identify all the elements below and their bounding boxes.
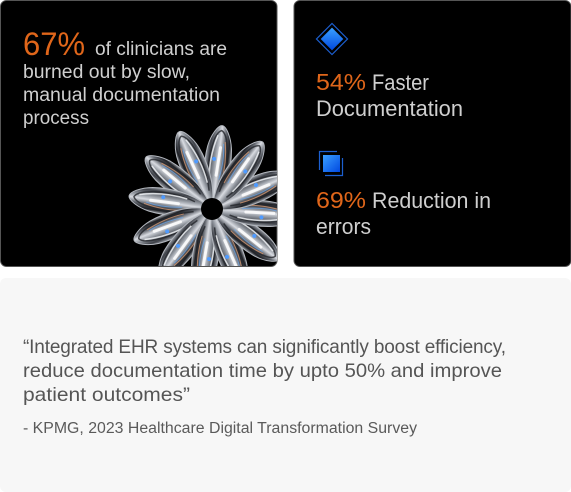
statistic: 69% reduction in errors xyxy=(316,187,491,239)
statistic text: 67% of clinicians: of clinicians are xyxy=(95,39,227,60)
quote text: “Integrated EHR systems can significantly boost efficiency, xyxy=(23,337,506,358)
statistic text: 67% of clinicians xyxy=(23,26,227,129)
statistic: 54% faster documentation: Faster xyxy=(372,70,429,95)
icon: blue diamond xyxy=(316,23,348,55)
statistic: 54% faster documentation: 54% xyxy=(316,69,366,95)
quote text: patient outcomes” xyxy=(23,384,190,406)
quote text xyxy=(23,337,506,406)
statistic: 69% reduction in errors: errors xyxy=(316,214,371,239)
panel: burnout statistic xyxy=(0,0,278,267)
statistic: 69% reduction in errors: 69% xyxy=(316,187,366,213)
quote source: - KPMG, 2023 Healthcare Digital Transformation Survey xyxy=(23,420,417,437)
panel: quote xyxy=(0,278,571,492)
image: glass flower xyxy=(128,125,277,266)
statistic text: 67% of clinicians: manual documentation xyxy=(23,85,220,106)
quote text: reduce documentation time by upto 50% and improve xyxy=(23,360,502,382)
statistic: 54% faster documentation xyxy=(316,69,463,121)
icon: blue layered squares xyxy=(320,152,342,176)
statistic: 54% faster documentation: Documentation xyxy=(316,96,463,121)
panel: benefits xyxy=(294,0,571,266)
statistic text: 67% of clinicians: burned out by slow, xyxy=(23,62,190,83)
statistic: 69% reduction in errors: Reduction in xyxy=(372,188,491,213)
statistic text: 67% of clinicians: process xyxy=(23,108,89,129)
statistic text: 67% of clinicians: 67% xyxy=(23,26,85,62)
